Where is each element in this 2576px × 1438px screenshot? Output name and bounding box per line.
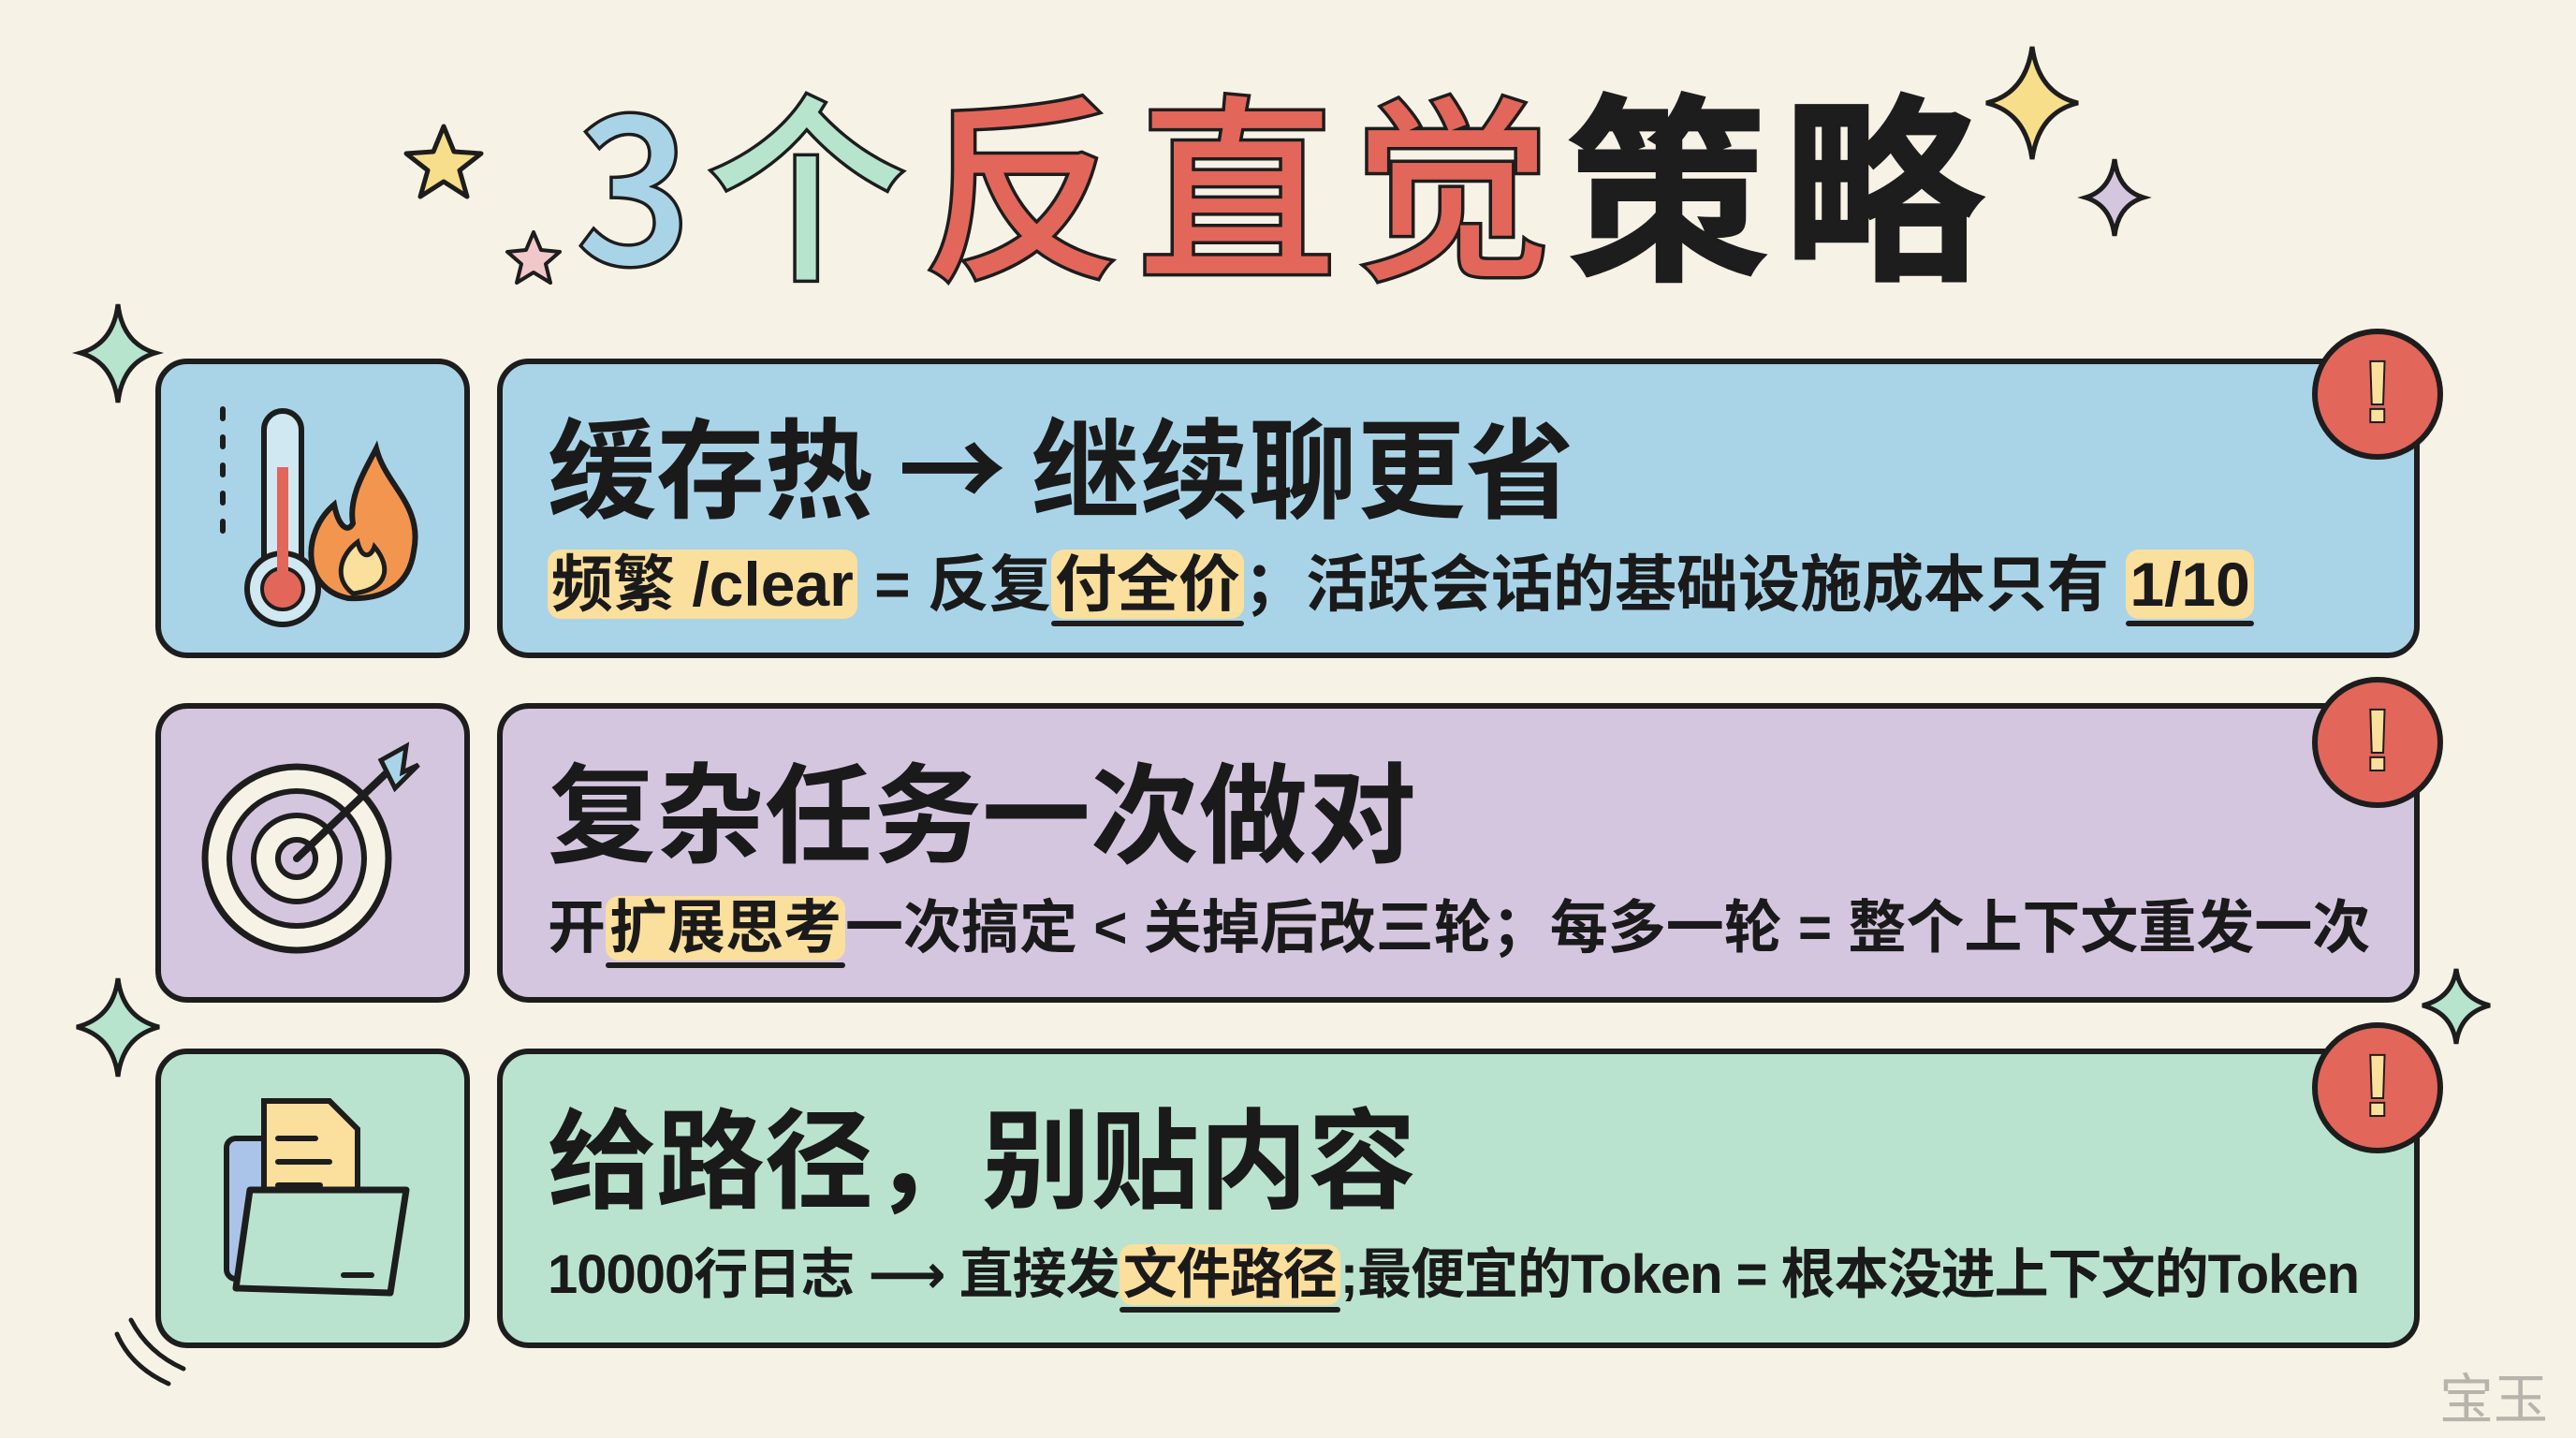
icon: green sparkle right	[2422, 969, 2490, 1044]
sub text: 10000行日志 ⟶ 直接发文件路径;最便宜的Token = 根本没进上下文的Token	[548, 1242, 2359, 1306]
sub text: 频繁 /clear = 反复付全价；活跃会话的基础设施成本只有 1/10	[551, 550, 2250, 619]
alert icon 3: !	[2364, 1038, 2392, 1134]
panel 2: complex task	[497, 703, 2420, 1003]
alert icon 3	[2312, 1022, 2443, 1153]
icon: yellow sparkle	[1986, 47, 2078, 159]
sub text: 开扩展思考一次搞定 < 关掉后改三轮；每多一轮 = 整个上下文重发一次	[548, 896, 2370, 961]
title: 3个反直觉策略	[578, 34, 1998, 321]
watermark: 宝玉	[2439, 1356, 2548, 1434]
icon: green sparkle left	[77, 978, 159, 1077]
icon: motion lines	[117, 1320, 183, 1384]
icon: green sparkle top-left	[80, 304, 155, 403]
alert icon 2	[2312, 677, 2443, 808]
icon: yellow star	[406, 126, 481, 197]
heading: 缓存热 → 继续聊更省	[548, 384, 1574, 541]
icon: pink star	[507, 232, 560, 283]
heading: 给路径，别贴内容	[548, 1074, 1416, 1231]
panel 1: cache	[497, 359, 2420, 658]
alert icon 1	[2312, 329, 2443, 460]
icon: purple sparkle	[2086, 159, 2144, 236]
heading: 复杂任务一次做对	[548, 728, 1416, 886]
alert icon 2: !	[2364, 693, 2392, 788]
panel 2 icon: target	[155, 703, 470, 1003]
panel 3 icon: folder	[155, 1049, 470, 1348]
panel 3: path not content	[497, 1049, 2420, 1348]
panel 1 icon: thermometer and flame	[155, 359, 470, 658]
alert icon 1: !	[2364, 345, 2392, 440]
